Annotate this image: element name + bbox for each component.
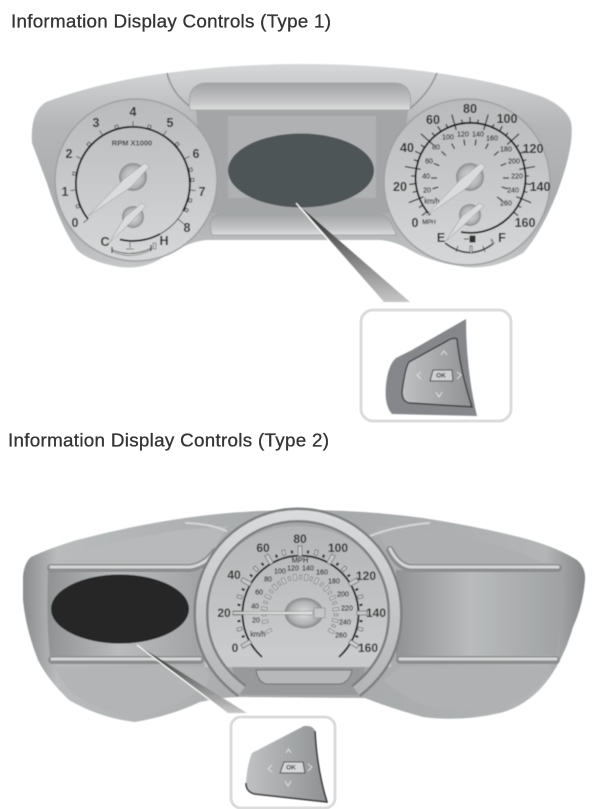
needle and hubs [119,163,147,191]
speedometer mph labels: 60 [426,113,440,127]
km/h labels: MPH [292,556,308,564]
control box: type 1 [361,310,511,421]
km/h labels: 240 [339,620,351,626]
tachometer labels: 3 [93,116,100,130]
km/h labels: 20 [252,618,260,624]
km/h labels: 200 [337,592,349,598]
speedometer mph labels: 0 [412,216,419,230]
km/h labels: 40 [251,604,259,610]
tachometer labels: C [100,235,110,249]
screen backing [228,116,376,198]
leader pointer: type 2 [137,645,247,713]
mph labels: 80 [293,532,307,546]
mph labels: 120 [356,569,376,583]
tachometer labels: 1 [62,185,69,199]
mph labels: 100 [328,541,348,555]
title: type 1: Information Display Controls (Type 1) [11,10,331,32]
arrows [417,351,461,397]
speedometer scale type 2 [217,532,386,657]
speedometer km/h labels: 260 [500,200,512,208]
speedometer [384,99,550,265]
speedometer mph labels: 80 [463,102,477,116]
speedometer km/h labels: 200 [508,158,520,166]
speedometer km/h labels [422,132,523,226]
crossbar and tunnel [205,658,391,667]
speedometer km/h labels: MPH [422,220,436,226]
km/h labels: 100 [274,568,286,576]
tachometer scale [76,127,190,219]
speedometer mph labels: 40 [400,141,414,155]
speedometer mph labels: 160 [515,216,535,230]
rib highlights [51,523,558,659]
centre panel [196,110,408,213]
tachometer labels: 8 [184,221,191,235]
speedometer km/h labels: km/h [424,198,440,206]
tachometer labels: 5 [167,116,174,130]
outer rim [201,515,395,691]
control box: type 2 [231,717,335,808]
speedometer km/h labels: 60 [425,158,433,166]
mph labels: 60 [256,541,270,555]
hub and needle [233,598,325,628]
speedometer km/h labels: 20 [423,188,431,194]
instrument cluster: type 2 [23,510,585,722]
top brow panel [189,83,411,110]
speedometer mph labels: 20 [393,180,407,194]
tachometer labels: H [159,234,169,248]
side pillars [167,73,437,110]
speedometer mph labels: 100 [497,112,517,126]
km/h labels: 80 [264,576,272,584]
km/h labels: km/h [250,632,266,638]
right centre panel [396,570,560,658]
speedometer km/h labels: 220 [511,174,523,180]
tachometer labels: 2 [66,147,73,161]
speedometer km/h labels: 40 [422,174,430,180]
speedometer km/h labels: 140 [472,132,484,138]
display ellipse [51,574,189,644]
speedometer km/h labels: 100 [442,134,454,142]
steering wheel button pad [386,319,477,416]
km/h labels: 220 [341,606,353,612]
left centre panel [47,570,205,658]
leader pointer: type 1 [296,203,410,302]
speedometer km/h labels: 120 [457,132,469,138]
km/h labels: 60 [255,590,263,596]
tachometer labels [62,105,206,249]
speedometer mph labels: 120 [523,142,543,156]
arrows [268,749,312,786]
mph labels: 0 [232,641,239,655]
km/h labels: 180 [328,578,340,586]
tachometer labels: 7 [199,185,206,199]
mph labels: 160 [358,641,378,655]
speedometer km/h labels: 240 [507,188,519,194]
rpm label: RPM X1000 [112,138,152,148]
mph labels: 140 [366,606,386,620]
display ellipse [228,134,374,208]
km/h labels: 120 [287,566,299,572]
speedometer scale [416,123,526,233]
OK button: OK [286,764,296,772]
speedometer mph labels [393,102,550,245]
speedometer face [205,526,391,658]
lower slot [210,214,396,235]
tachometer labels: 0 [72,216,79,230]
mph labels: 40 [227,568,241,582]
km/h labels: 160 [316,570,328,576]
km/h labels [250,556,353,640]
tachometer labels: 6 [193,147,200,161]
speedometer km/h labels: 160 [486,136,498,142]
temperature gauge [112,241,156,256]
fuel gauge [445,236,494,253]
speedometer mph labels: 140 [530,180,550,194]
cluster body [32,64,572,268]
km/h labels: 140 [302,566,314,572]
speedometer km/h labels: 80 [432,144,440,152]
tachometer [55,99,217,261]
tachometer labels: 4 [130,105,137,119]
speedometer mph labels: E [437,231,445,245]
cluster body [23,510,585,722]
upper panels [55,526,228,565]
OK button: OK [436,372,446,380]
rib shadows [51,550,558,660]
title: type 2: Information Display Controls (Type 2) [8,430,329,450]
lower lobes [55,667,209,716]
speedometer needle and hubs [456,163,484,191]
mph labels [217,532,386,655]
speedometer km/h labels: 180 [500,146,512,154]
instrument cluster: type 1 [32,64,572,268]
mph labels: 20 [217,606,231,620]
km/h labels: 260 [335,632,347,640]
speedometer mph labels: F [498,231,506,245]
